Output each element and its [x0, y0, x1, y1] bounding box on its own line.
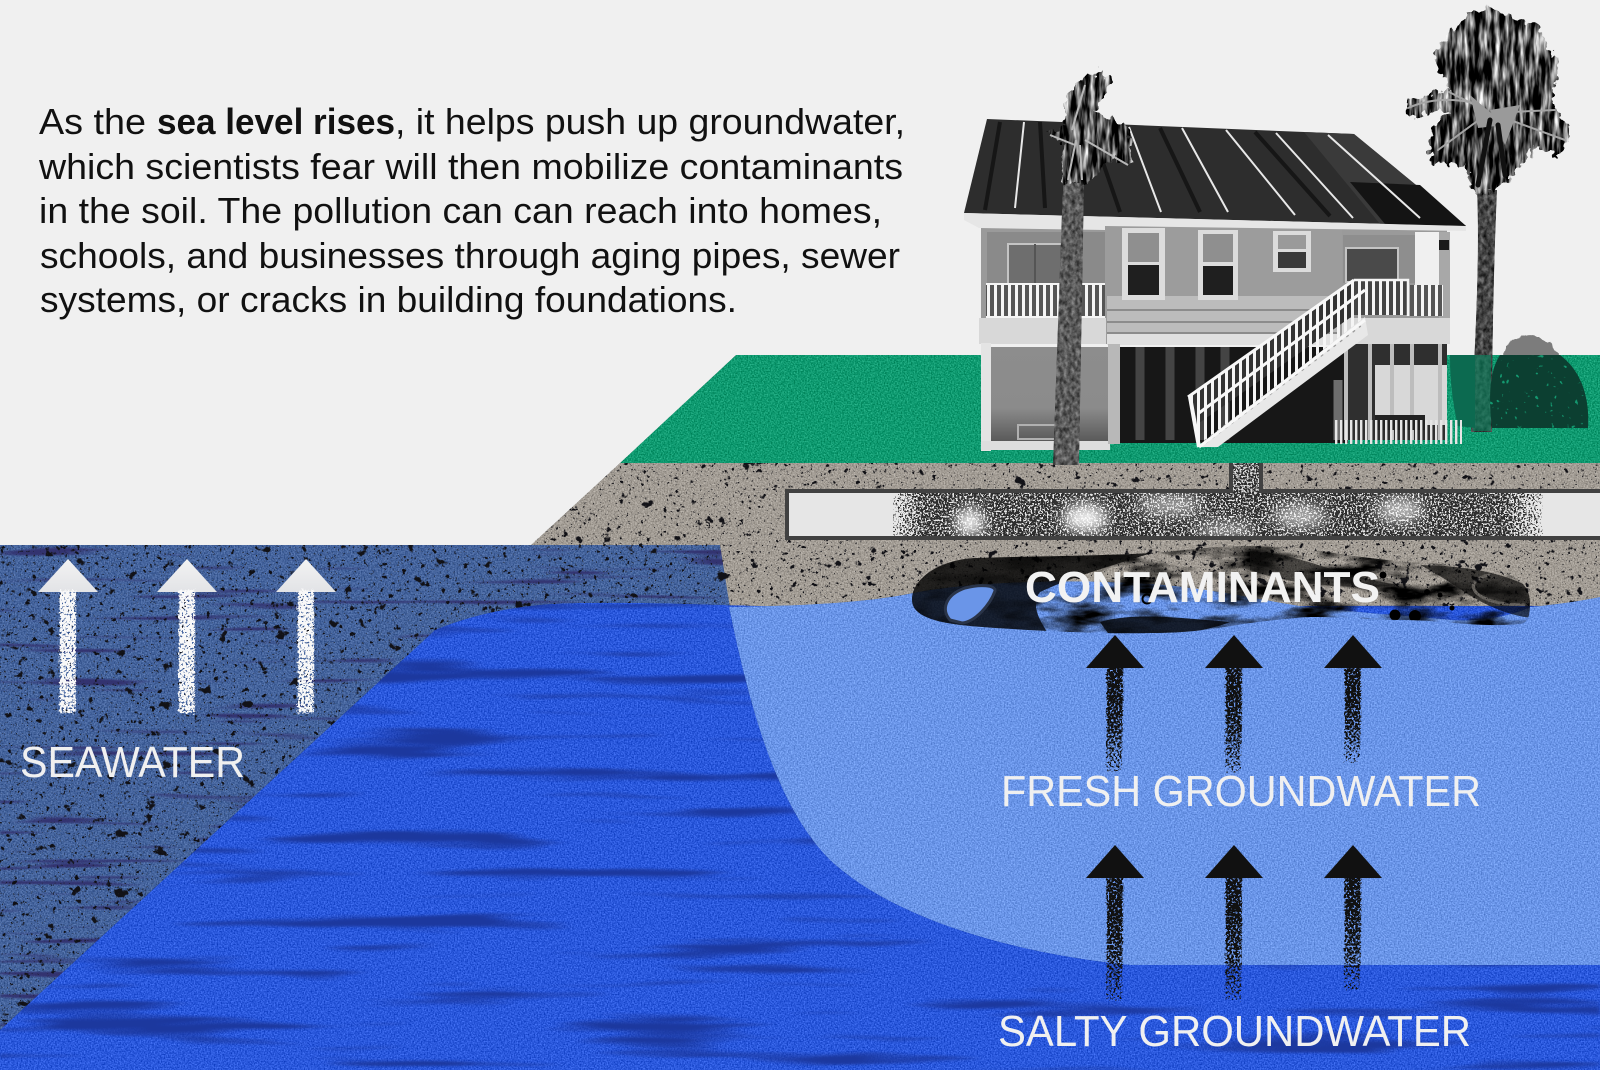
- pollution in pipe: [787, 493, 1600, 537]
- bush: [1450, 336, 1588, 428]
- dark wave streaks: [0, 600, 1600, 1070]
- arrow 1: [38, 559, 98, 713]
- intro text block: schools, and businesses through aging pipes, sewer: [40, 235, 900, 276]
- left porch: [986, 232, 1106, 318]
- floor beam: [979, 318, 1106, 344]
- label: salty groundwater: SALTY GROUNDWATER: [998, 1007, 1471, 1056]
- fronds: [1408, 92, 1565, 185]
- contaminants plume: [912, 546, 1530, 634]
- light blurs in pipe: [956, 495, 1424, 538]
- siding bands: [1107, 296, 1340, 345]
- arrow 3: [276, 559, 336, 713]
- fresh groundwater: [729, 581, 1600, 965]
- intro text block: systems, or cracks in building foundations.: [40, 279, 737, 320]
- trunk base in lawn: [1473, 355, 1491, 431]
- arrow: [1324, 635, 1382, 762]
- arrow: [1086, 845, 1144, 1000]
- white arrows: seawater: [38, 559, 336, 713]
- house: [964, 119, 1466, 451]
- right porch: [1343, 232, 1450, 318]
- roof: [964, 119, 1466, 226]
- black arrows: lower row: [1086, 845, 1382, 1000]
- eave: [964, 213, 1466, 231]
- seawater region: [0, 545, 740, 1045]
- intro text block: , it helps push up groundwater,: [395, 101, 905, 142]
- fine debris: [0, 463, 1600, 1070]
- arrow: [1324, 845, 1382, 990]
- garage: [981, 343, 1120, 451]
- crown: [1406, 8, 1572, 195]
- label: fresh groundwater: FRESH GROUNDWATER: [1001, 767, 1481, 816]
- centre block: [1105, 224, 1342, 344]
- window 2: [1198, 230, 1238, 300]
- arrow: [1086, 635, 1144, 772]
- arrow: [1205, 845, 1263, 1000]
- fronds: [1050, 85, 1128, 180]
- debris specks across soil and seawater: [0, 463, 1600, 1070]
- label: contaminants: CONTAMINANTS: [1025, 563, 1380, 612]
- door: [1008, 244, 1062, 286]
- open ground level: [1120, 344, 1447, 443]
- intro text block: As the: [39, 101, 146, 142]
- trunk: [1053, 183, 1084, 465]
- palm tree: front: [1045, 70, 1132, 465]
- pipe outline: [787, 463, 1600, 538]
- arrow: [1205, 635, 1263, 772]
- pipe interior: [787, 491, 1600, 538]
- window 3: [1273, 231, 1311, 272]
- label: seawater: SEAWATER: [20, 738, 245, 787]
- window 1: [1122, 228, 1165, 300]
- green lawn: [620, 355, 1600, 463]
- crown: [1045, 70, 1132, 185]
- railing: [986, 284, 1106, 318]
- upper wall: [981, 225, 1447, 320]
- underground pipe: [787, 463, 1600, 538]
- staircase: [1188, 280, 1368, 447]
- seawater streaks: [0, 545, 740, 1045]
- intro text block: in the soil. The pollution can can reach into homes,: [39, 190, 882, 231]
- intro text block: which scientists fear will then mobilize contaminants: [38, 146, 903, 187]
- large debris chunks across soil and seawater: [0, 463, 1600, 1070]
- black arrows: upper row: [1086, 635, 1382, 772]
- intro text block: [38, 101, 905, 320]
- oily texture: [912, 546, 1530, 634]
- trunk: [1471, 190, 1497, 432]
- palm tree: right: [1406, 8, 1572, 432]
- picket fence: [1335, 420, 1462, 444]
- intro text block: sea level rises: [157, 101, 395, 142]
- soil layer: [531, 463, 1600, 640]
- arrow 2: [157, 559, 217, 713]
- blue hole in plume: [945, 586, 995, 623]
- salty groundwater: [0, 600, 1600, 1070]
